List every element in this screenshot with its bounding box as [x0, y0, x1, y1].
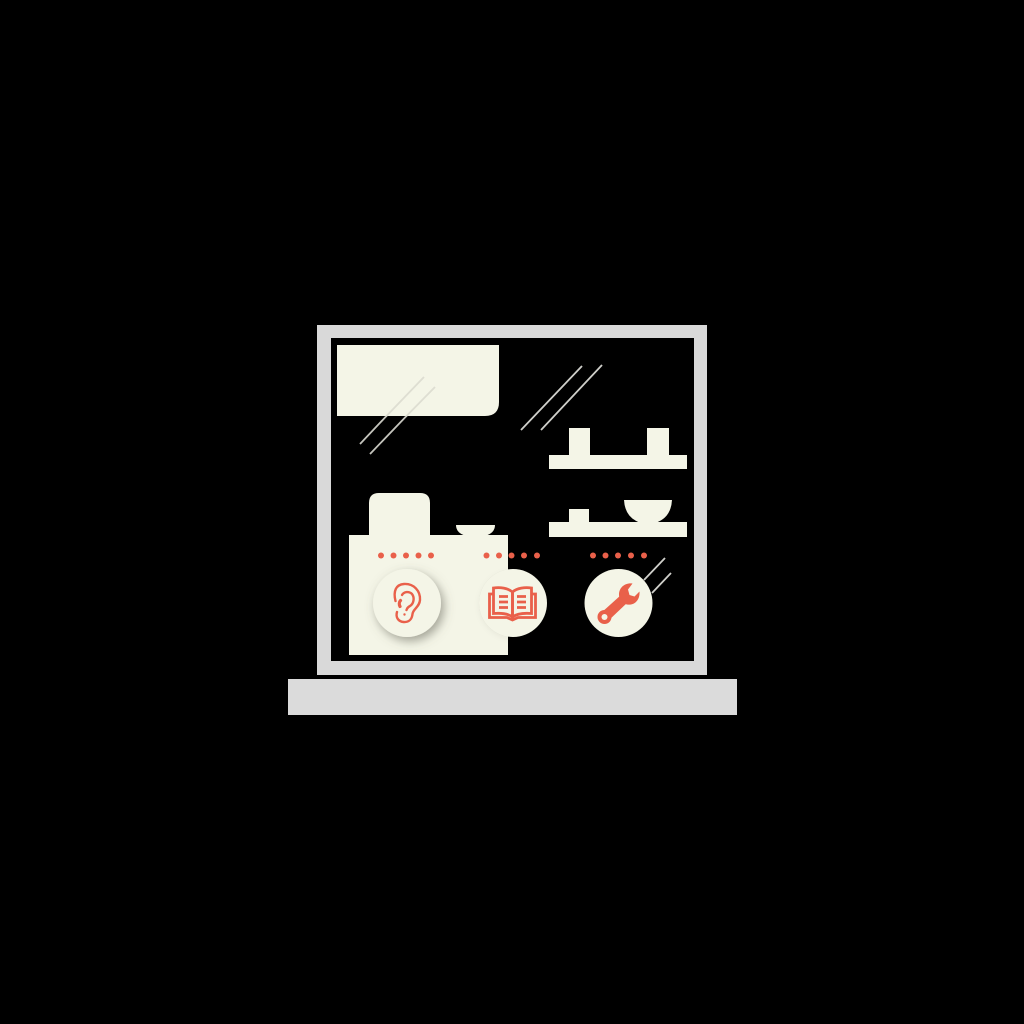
- lower shelf with items: [549, 500, 687, 537]
- counter cabinet with box and bowl: [349, 493, 508, 655]
- window frame: [317, 325, 707, 675]
- illustration: display window: [288, 325, 737, 715]
- dotted row 1: [378, 552, 434, 558]
- window sill: [288, 679, 737, 715]
- glass glare lines upper right: [521, 365, 602, 430]
- dotted row 2: [484, 552, 540, 558]
- icon: open book: [479, 569, 547, 637]
- glass glare lines over panel: [360, 377, 435, 454]
- icon: ear: [373, 569, 441, 637]
- top-left panel: [337, 345, 499, 416]
- upper shelf with items: [549, 428, 687, 469]
- dotted row 3: [590, 552, 647, 558]
- glass glare lines near wrench: [644, 558, 671, 593]
- icon: wrench: [584, 569, 652, 637]
